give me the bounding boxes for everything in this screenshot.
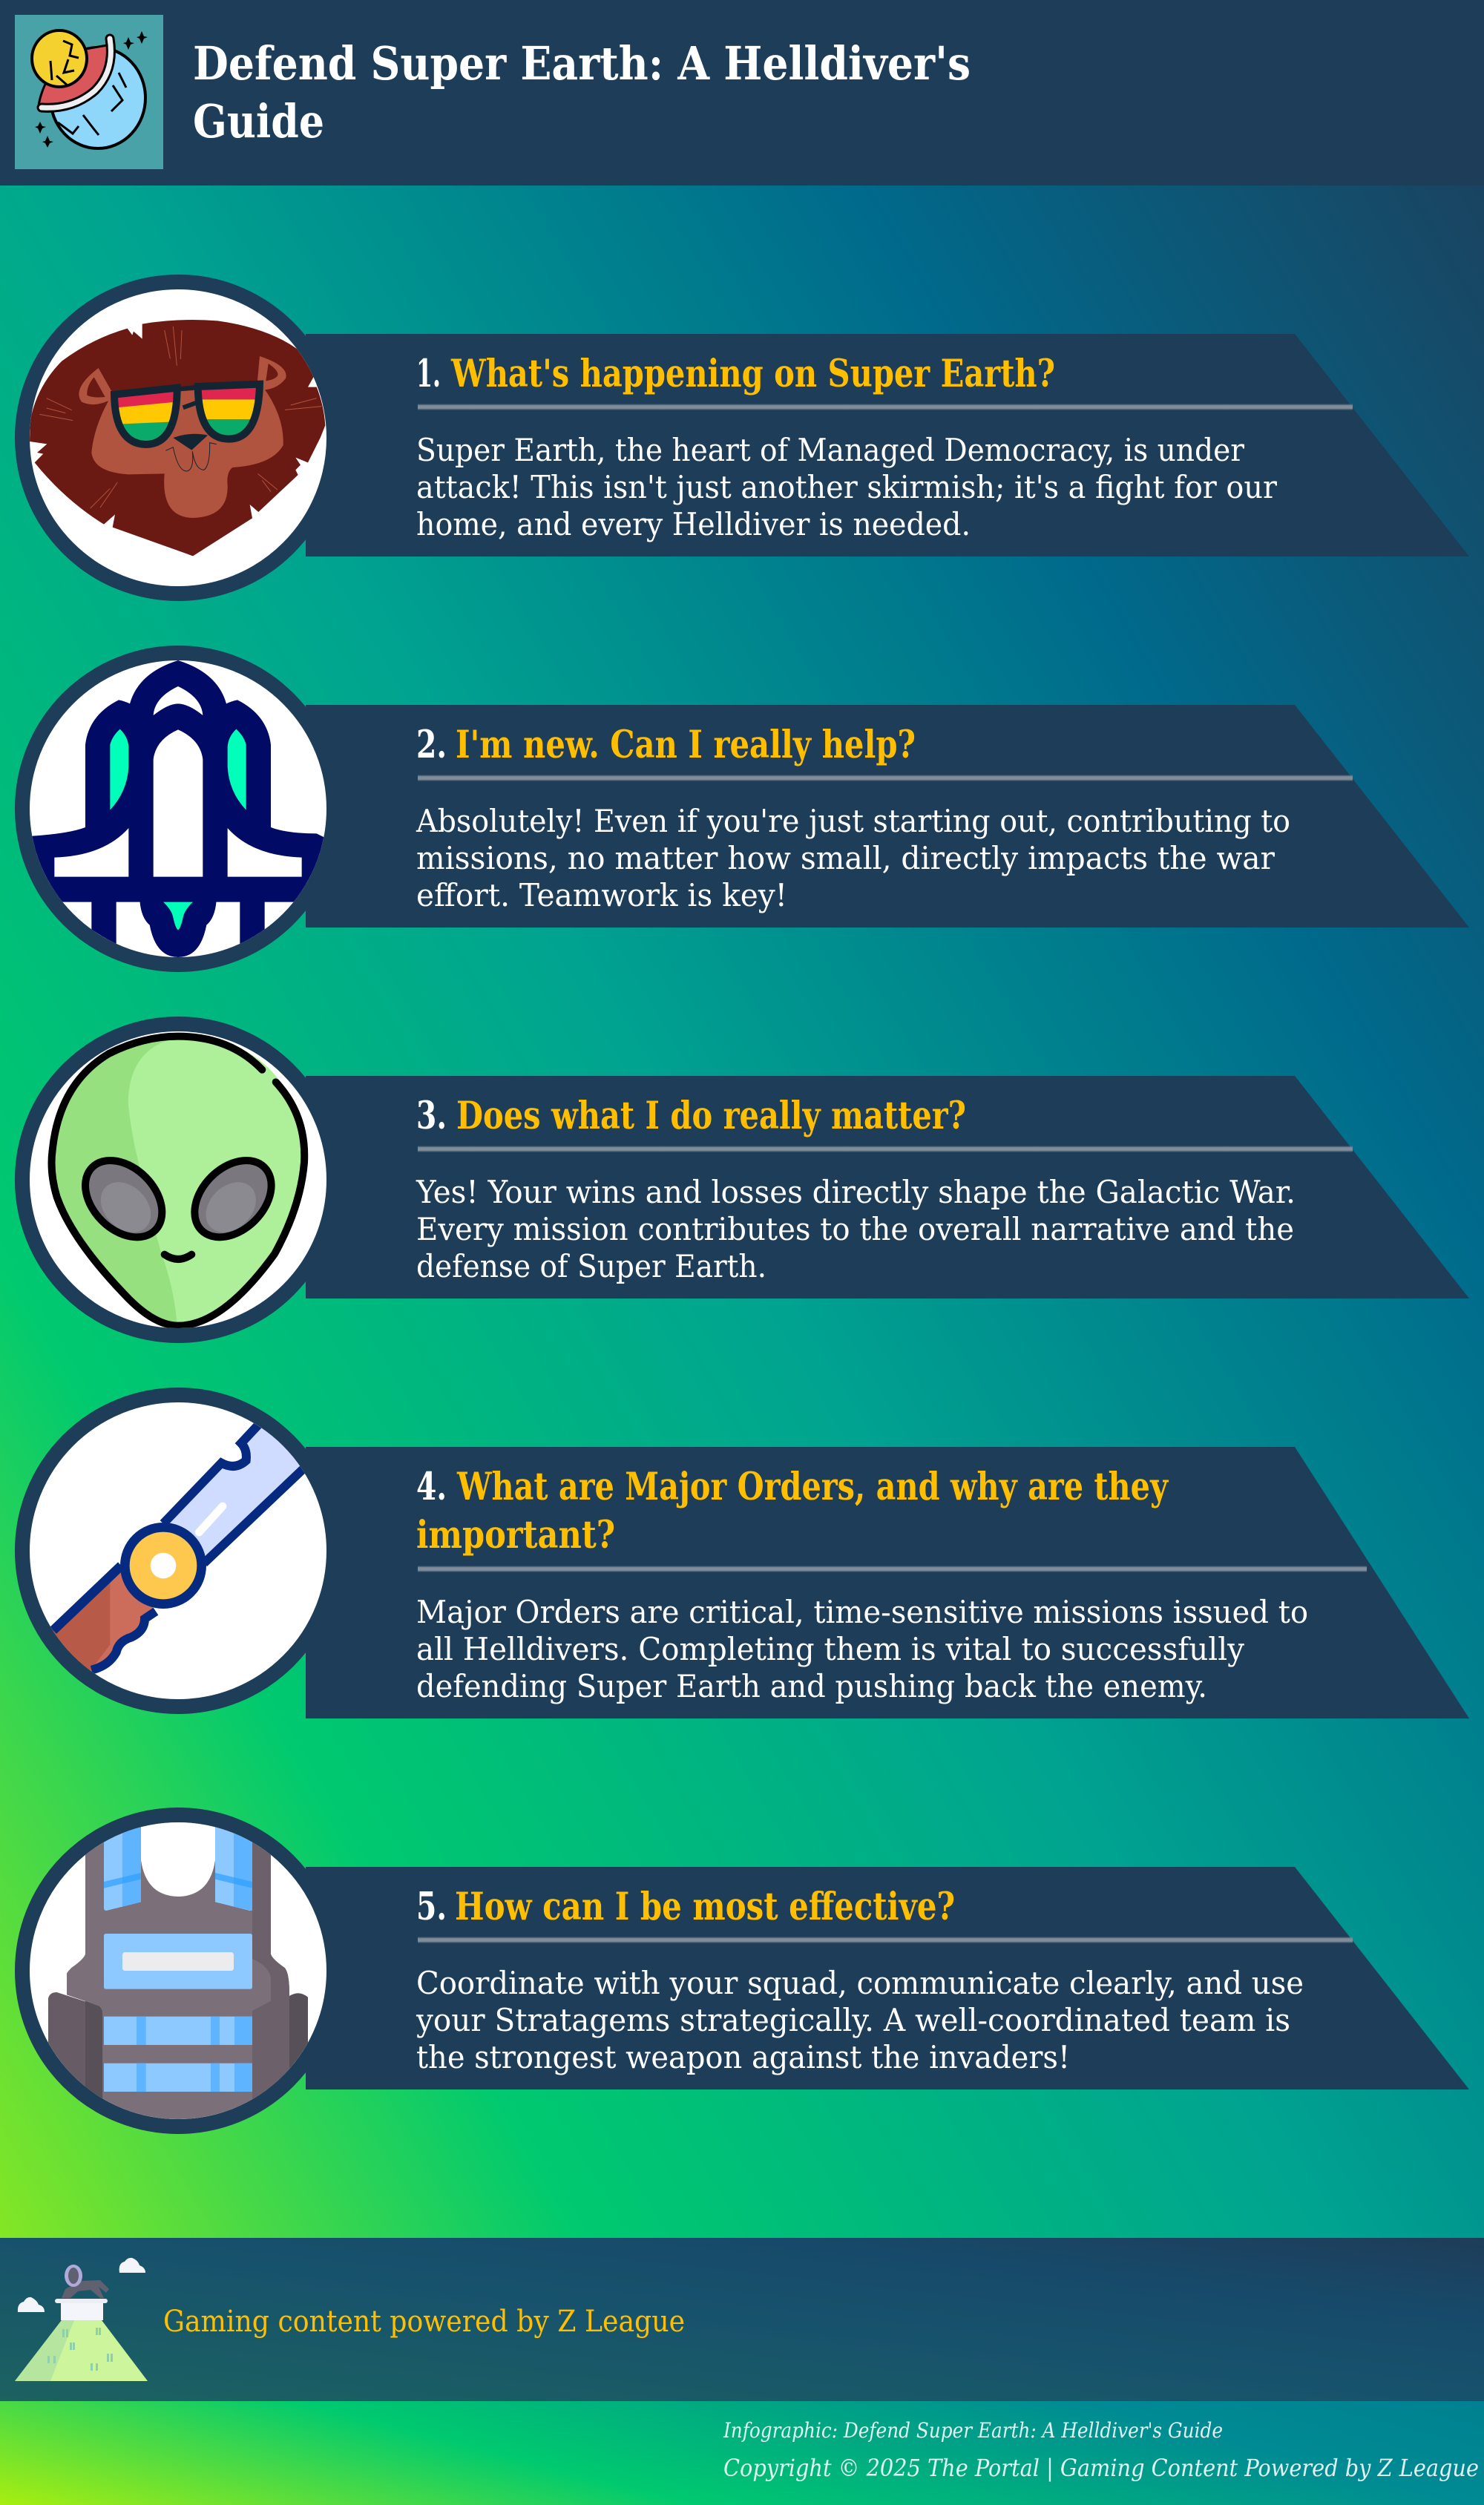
panel 1 heading: What's happening on Super Earth?	[450, 352, 1055, 396]
panel 3 body text	[416, 1174, 1296, 1284]
footer credits: Copyright © 2025 The Portal | Gaming Content Powered by Z League	[723, 2454, 1479, 2482]
panel 3 banner	[306, 1076, 1469, 1299]
panel 2 heading: 2.	[416, 723, 447, 767]
panel 5 body text: Coordinate with your squad, communicate clearly, and use	[416, 1965, 1304, 2001]
panel 5 heading: How can I be most effective?	[455, 1885, 955, 1929]
sponsor band	[0, 2238, 1484, 2401]
icon: observatory on a green hill	[15, 2258, 148, 2381]
footer credits	[723, 2418, 1479, 2482]
panel 4 body text: all Helldivers. Completing them is vital to successfully	[416, 1631, 1245, 1667]
panel 1 banner	[306, 334, 1469, 557]
panel 5 body text: your Stratagems strategically. A well-coordinated team is	[416, 2002, 1290, 2038]
footer strip glow	[0, 2401, 1484, 2505]
panel 3 medallion: alien head	[22, 1024, 334, 1336]
panel 4 heading: What are Major Orders, and why are they	[456, 1465, 1169, 1509]
panel 1 body text: attack! This isn't just another skirmish; it's a fight for our	[416, 469, 1278, 505]
panel 4 body text: Major Orders are critical, time-sensitive missions issued to	[416, 1594, 1308, 1630]
panel 1: what's happening	[22, 282, 1469, 594]
panel 4: major orders	[22, 1395, 1469, 1718]
panel 4 body text: defending Super Earth and pushing back the enemy.	[416, 1668, 1207, 1704]
panel 5 body text: the strongest weapon against the invaders!	[416, 2039, 1070, 2075]
panel 3 heading: 3.	[416, 1094, 447, 1138]
panel 1 medallion: lion with sunglasses	[22, 282, 334, 594]
panel 2 banner	[306, 705, 1469, 928]
title: Defend Super Earth: A Helldiver's	[193, 36, 971, 91]
panel 1 body text: home, and every Helldiver is needed.	[416, 506, 971, 542]
panel 3 heading: Does what I do really matter?	[456, 1094, 966, 1138]
panel 3: does it matter	[22, 1024, 1469, 1336]
panel 1 body text	[416, 432, 1278, 542]
panel 1 body text: Super Earth, the heart of Managed Democracy, is under	[416, 432, 1245, 468]
panel 4 body text	[416, 1594, 1308, 1704]
panel 5: be effective	[22, 1815, 1469, 2127]
panel 4 heading: 4.	[416, 1465, 447, 1509]
panel 5 heading: 5.	[416, 1885, 447, 1929]
panel 4 heading	[416, 1465, 1169, 1557]
panel 1 heading: 1.	[416, 352, 441, 396]
panel 3 body text: Yes! Your wins and losses directly shape the Galactic War.	[416, 1174, 1296, 1210]
panel 3 body text: defense of Super Earth.	[416, 1248, 766, 1284]
title	[193, 36, 971, 148]
panel 2 heading: I'm new. Can I really help?	[456, 723, 916, 767]
panel 4 banner	[306, 1447, 1469, 1718]
header bar	[0, 0, 1484, 186]
panel 4 heading: important?	[416, 1513, 615, 1557]
panel 2 body text: Absolutely! Even if you're just starting out, contributing to	[416, 803, 1290, 839]
panel 2 medallion: rocket	[22, 653, 334, 965]
panel 5 banner	[306, 1867, 1469, 2089]
panel 3 body text: Every mission contributes to the overall narrative and the	[416, 1211, 1294, 1247]
title: Guide	[193, 94, 324, 148]
panel 2 body text: effort. Teamwork is key!	[416, 877, 787, 913]
panel 4 medallion: sword	[22, 1395, 334, 1707]
icon: shattered planet logo	[15, 15, 163, 169]
sponsor text: Gaming content powered by Z League	[163, 2305, 685, 2339]
footer credits: Infographic: Defend Super Earth: A Helldiver's Guide	[723, 2418, 1223, 2443]
panel 2: I'm new	[22, 653, 1469, 965]
panel 5 body text	[416, 1965, 1304, 2075]
panel 5 medallion: armored vest	[22, 1815, 334, 2127]
panel 2 body text	[416, 803, 1290, 913]
panel 2 body text: missions, no matter how small, directly impacts the war	[416, 840, 1275, 876]
